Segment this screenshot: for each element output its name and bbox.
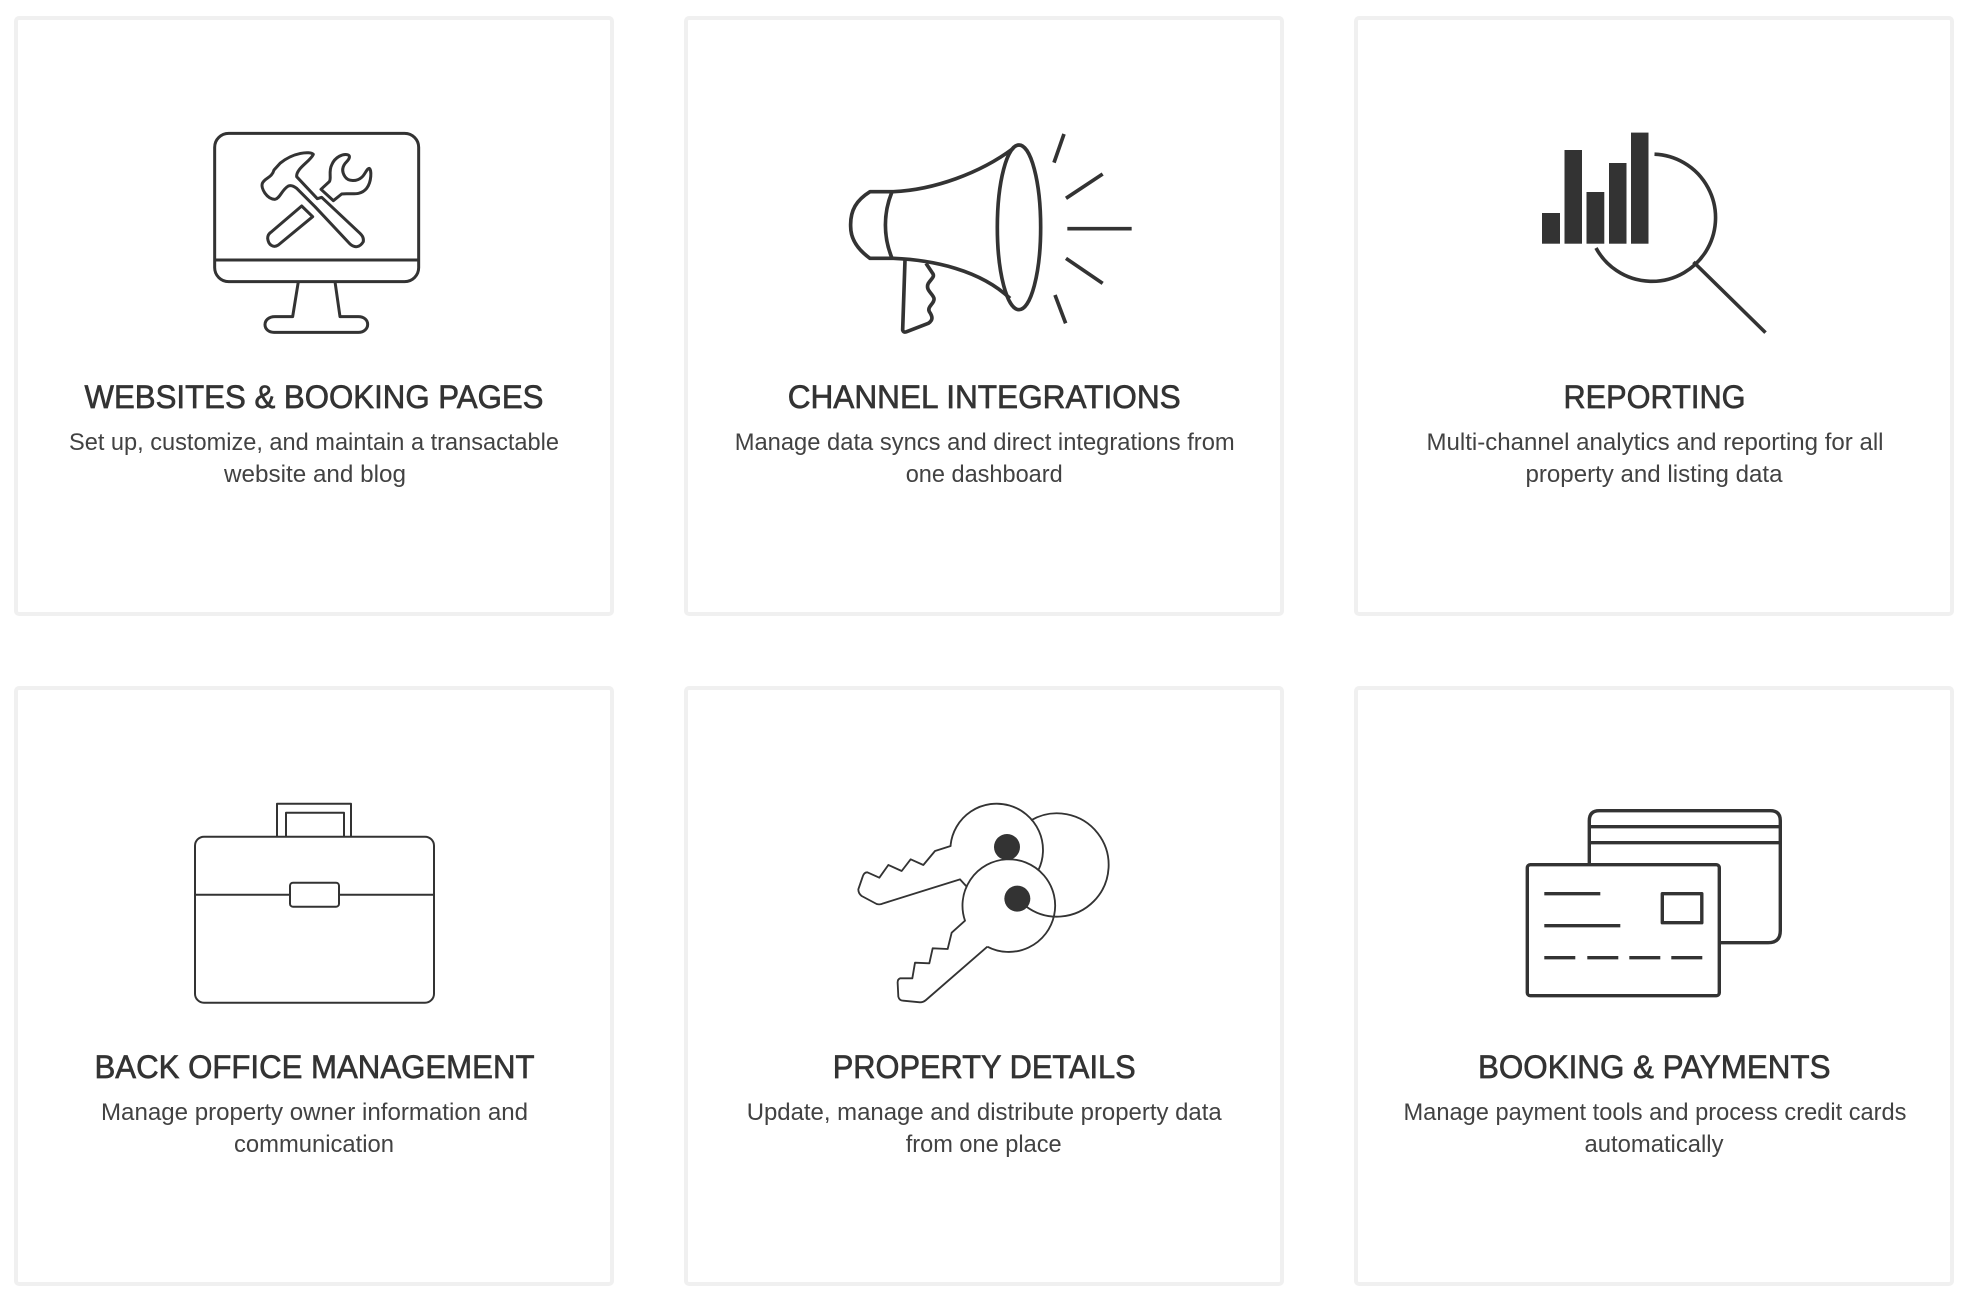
text: reporting description xyxy=(1426,429,1884,488)
heading: reporting: REPORTING xyxy=(1564,379,1746,415)
text: websites description xyxy=(69,429,559,488)
heading: back office management: BACK OFFICE MANAGEMENT xyxy=(94,1049,534,1085)
text: back office description: Manage property owner information and xyxy=(101,1099,528,1126)
heading: booking and payments: BOOKING & PAYMENTS xyxy=(1478,1049,1830,1085)
panel: websites and booking pages xyxy=(16,18,612,614)
panel: property details xyxy=(686,688,1282,1284)
heading: websites and booking pages: WEBSITES & BOOKING PAGES xyxy=(84,379,544,415)
text: channel integrations description: Manage data syncs and direct integrations from xyxy=(735,429,1235,456)
text: property details description: Update, manage and distribute property data xyxy=(747,1099,1222,1126)
text: reporting description: Multi-channel analytics and reporting for all xyxy=(1426,429,1884,456)
text: channel integrations description xyxy=(735,429,1235,488)
icon: megaphone xyxy=(851,134,1132,332)
panel: reporting xyxy=(1356,18,1952,614)
panel: channel integrations xyxy=(686,18,1282,614)
text: property details description xyxy=(747,1099,1222,1158)
icon: bar chart with magnifier xyxy=(1542,133,1766,333)
text: booking and payments description xyxy=(1404,1099,1906,1158)
text: booking and payments description: Manage payment tools and process credit cards xyxy=(1404,1099,1906,1126)
text: back office description xyxy=(101,1099,528,1158)
heading: property details: PROPERTY DETAILS xyxy=(833,1049,1136,1085)
icon: keys xyxy=(858,804,1109,1002)
heading: channel integrations: CHANNEL INTEGRATIONS xyxy=(788,379,1181,415)
icon: credit cards xyxy=(1527,811,1780,996)
text: back office description: communication xyxy=(234,1131,394,1158)
text: websites description: Set up, customize, and maintain a transactable xyxy=(69,429,559,456)
icon: briefcase xyxy=(195,804,434,1003)
text: channel integrations description: one dashboard xyxy=(906,461,1063,488)
icon: monitor with hammer and wrench xyxy=(215,133,419,332)
text: reporting description: property and listing data xyxy=(1526,461,1783,488)
text: booking and payments description: automatically xyxy=(1584,1131,1724,1158)
panel: booking and payments xyxy=(1356,688,1952,1284)
text: websites description: website and blog xyxy=(223,461,406,488)
panel: back office management xyxy=(16,688,612,1284)
text: property details description: from one place xyxy=(906,1131,1062,1158)
